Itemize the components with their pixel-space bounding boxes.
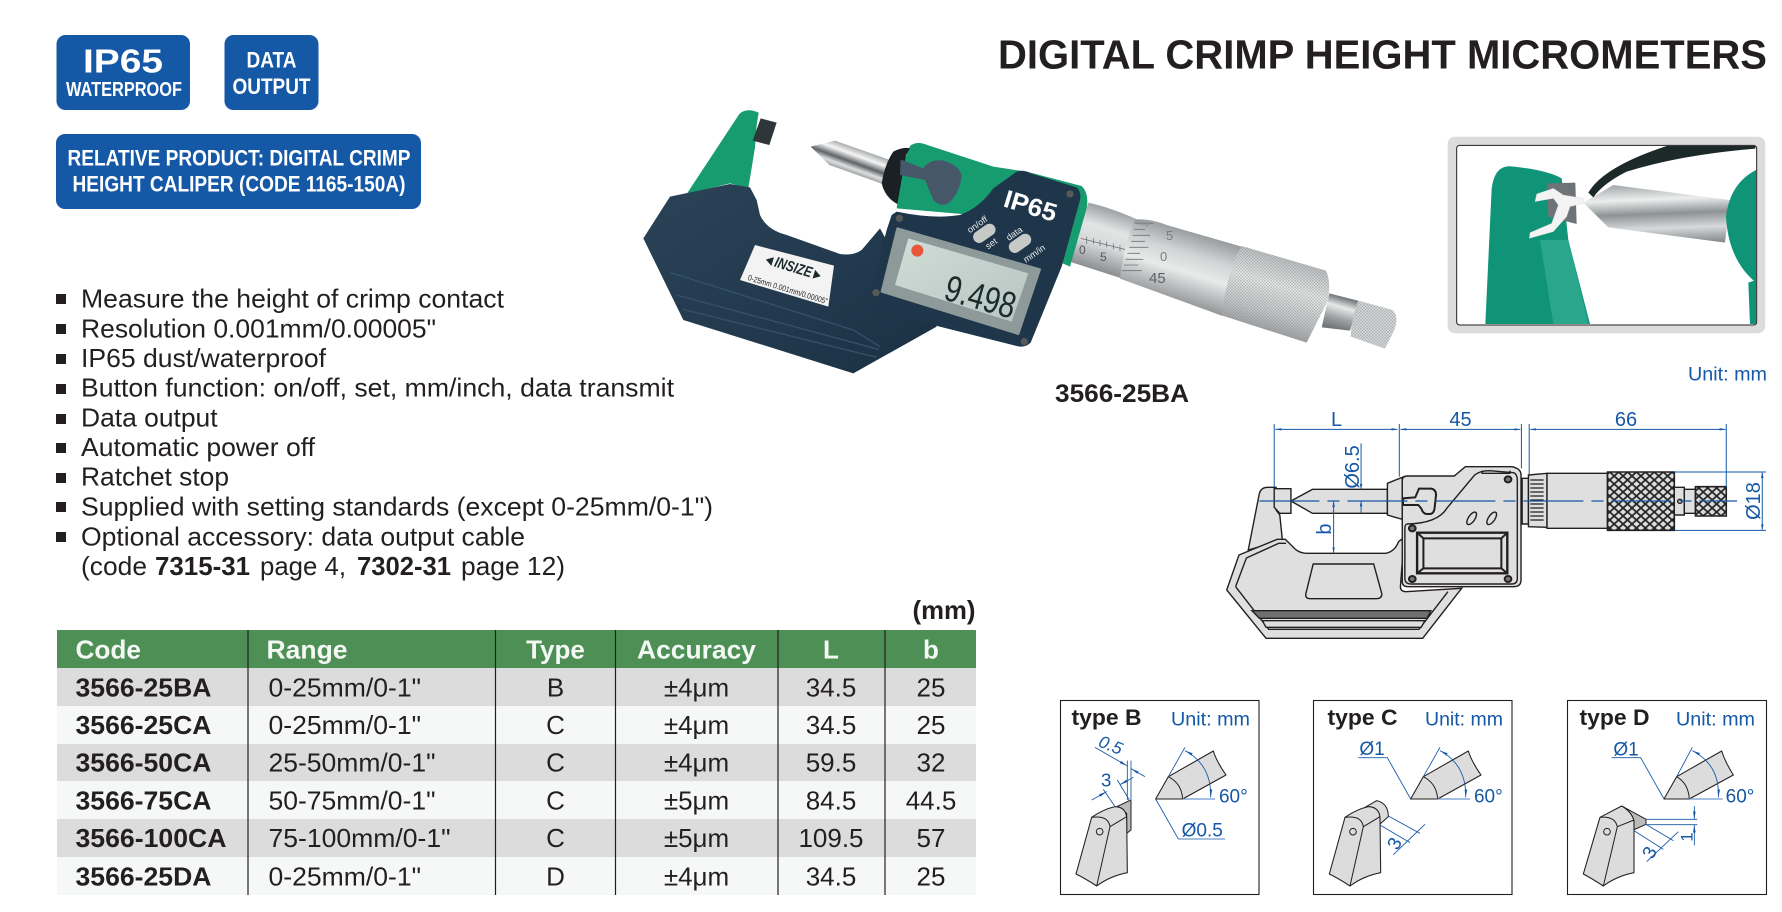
panel: type B (1060, 700, 1259, 894)
table rows: 25-50mm/0-1" (268, 748, 436, 778)
navy display head (869, 171, 1080, 347)
feature bullet list: Button function: on/off, set, mm/inch, data transmit (81, 373, 675, 403)
anvil blade D (1622, 806, 1646, 830)
LCD screen (895, 238, 1028, 322)
buttons (1465, 511, 1478, 526)
blue dimension lines C (1358, 747, 1470, 855)
spindle (1583, 185, 1730, 243)
dimension drawing (1227, 409, 1766, 638)
table rows: 3566-100CA (76, 823, 227, 853)
table rows: ±4μm (664, 862, 729, 892)
table rows: ±5μm (664, 823, 729, 853)
green head casing (897, 143, 1087, 267)
table unit label: (mm) (912, 595, 976, 625)
table header: Range (266, 634, 348, 664)
table rows: 59.5 (806, 748, 856, 778)
feature bullet list: Supplied with setting standards (except 0-25mm/0-1") (81, 491, 713, 521)
product photo: digital micrometer: 0 (1079, 243, 1086, 257)
badge: IP65 waterproof (56, 35, 190, 110)
product photo: digital micrometer: set (983, 236, 999, 251)
feature bullet list: Measure the height of crimp contact (81, 283, 505, 313)
product photo: digital micrometer: mm/in (1021, 242, 1047, 265)
product photo: digital micrometer: IP65 (1000, 185, 1060, 228)
green head (1726, 170, 1756, 283)
panel: type C: 3 (1383, 834, 1406, 853)
anvil blade B (1117, 801, 1131, 833)
dimension drawing: Ø6.5 (1342, 445, 1364, 489)
panel: type D: 3 (1638, 843, 1661, 862)
table rows: 3566-50CA (76, 748, 212, 778)
badge: IP65 waterproof: WATERPROOF (66, 79, 182, 101)
table rows: 57 (917, 823, 945, 853)
product photo: digital micrometer (643, 110, 1396, 373)
panel: type D (1568, 700, 1766, 894)
table rows: 0-25mm/0-1" (268, 862, 421, 892)
feature bullet list: Optional accessory: data output cable (81, 521, 525, 551)
key knob (900, 159, 962, 205)
thimble graduations (1122, 223, 1153, 271)
cone tip D (1664, 751, 1733, 799)
panel: type B: 3 (1101, 770, 1111, 791)
feature bullet list: IP65 dust/waterproof (81, 343, 327, 373)
thimble body (1120, 219, 1242, 316)
table rows: 25 (917, 710, 945, 740)
table header: Type (526, 634, 585, 664)
anvil (1547, 183, 1577, 224)
badge: IP65 waterproof: IP65 (83, 42, 163, 80)
product photo: digital micrometer: 45 (1149, 270, 1166, 287)
table rows: ±4μm (664, 673, 729, 703)
knurled grip (1222, 246, 1329, 343)
ratchet knob (1351, 301, 1396, 349)
badge: relative product: RELATIVE PRODUCT: DIGITAL CRIMP (68, 146, 410, 170)
table header: Code (76, 634, 141, 664)
table rows: ±4μm (664, 748, 729, 778)
table header: Accuracy (637, 634, 757, 664)
panel: type B: type B (1072, 705, 1142, 730)
product photo: digital micrometer: data (1004, 224, 1024, 243)
dimension drawing: L (1331, 409, 1342, 431)
sleeve, thimble (1522, 478, 1528, 524)
ratchet neck (1322, 293, 1359, 331)
dimension drawing: b (1314, 523, 1336, 535)
navy rubber frame (643, 184, 937, 373)
table rows: C (546, 748, 565, 778)
feature bullet list: 7302-31 (357, 551, 451, 581)
feature bullet list: 7315-31 (155, 551, 250, 581)
table rows: C (546, 710, 565, 740)
table rows: 3566-25CA (76, 710, 212, 740)
panel: type C: Ø1 (1359, 739, 1385, 760)
LCD bezel (882, 228, 1040, 334)
key (1403, 489, 1436, 514)
table rows: 109.5 (798, 823, 864, 853)
badge: relative product: HEIGHT CALIPER (CODE 1165-150A) (72, 172, 406, 196)
table rows: 34.5 (806, 673, 856, 703)
badge: data output: DATA (246, 48, 297, 72)
panel: type D: Ø1 (1613, 739, 1639, 760)
cone tip B (1156, 751, 1226, 799)
product photo: digital micrometer: on/off (965, 214, 990, 235)
anvil cylinder C (1365, 801, 1388, 824)
panel: type D: 60° (1726, 787, 1754, 808)
collar (1387, 477, 1402, 519)
screws (896, 215, 903, 222)
table rows: 25 (917, 673, 945, 703)
silver sleeve (1071, 203, 1138, 280)
inset photo: crimp contact measured (1448, 137, 1765, 333)
unit label: Unit: mm (1688, 364, 1767, 386)
badge: data output: OUTPUT (232, 74, 311, 99)
title: DIGITAL CRIMP HEIGHT MICROMETERS (998, 32, 1767, 78)
panel: type B: 0.5 (1096, 731, 1126, 759)
panel: type D: Unit: mm (1676, 708, 1755, 730)
panel: type C (1314, 700, 1512, 894)
anvil and spindle (1274, 489, 1291, 513)
record dot (911, 245, 923, 257)
badge: data output (224, 35, 318, 110)
table rows: 44.5 (906, 786, 956, 816)
crimp terminal (1529, 188, 1583, 238)
feature bullet list: (code (81, 551, 147, 581)
table rows: 3566-25BA (76, 673, 212, 703)
product photo: digital micrometer: 0-25mm 0.001mm/0.00005" (747, 273, 829, 306)
blue dimension lines B (1092, 747, 1225, 839)
table rows (57, 630, 976, 895)
table rows: 0-25mm/0-1" (268, 710, 421, 740)
table rows: 25 (917, 862, 945, 892)
panel: type C: Unit: mm (1425, 708, 1503, 730)
frame grooves (671, 273, 880, 357)
table rows: 3566-75CA (76, 786, 212, 816)
table header: L (823, 634, 839, 664)
sleeve scale ticks (1081, 237, 1127, 251)
display (1417, 533, 1507, 573)
green anvil post (1485, 166, 1590, 324)
table rows: C (546, 786, 565, 816)
feature bullet list: Ratchet stop (81, 462, 229, 492)
feature bullet list: page 4, (260, 551, 346, 581)
table rows: 3566-25DA (76, 862, 212, 892)
white logo label (740, 245, 834, 307)
panel: type B: 60° (1219, 787, 1248, 808)
green anvil arm (687, 110, 759, 194)
cone tip C (1411, 751, 1481, 799)
extension lines (1274, 424, 1766, 530)
black collar (882, 148, 910, 204)
table header: b (923, 634, 939, 664)
table rows: C (546, 823, 565, 853)
table rows: 32 (917, 748, 945, 778)
table header (57, 630, 976, 668)
product photo: digital micrometer: 5 (1166, 228, 1173, 243)
blue dimension lines D (1612, 747, 1723, 862)
spindle tip (811, 141, 890, 184)
model caption: 3566-25BA (1055, 380, 1189, 408)
dimension drawing: 66 (1615, 409, 1637, 431)
table rows: B (547, 673, 564, 703)
product photo: digital micrometer: ◄INSIZE► (761, 251, 825, 285)
table rows: 50-75mm/0-1" (268, 786, 436, 816)
badge: relative product (56, 134, 421, 209)
table rows: ±5μm (664, 786, 729, 816)
head (1402, 467, 1521, 587)
product photo: digital micrometer: 5 (1100, 250, 1107, 264)
panel: type C: 60° (1474, 787, 1503, 808)
frame grooves (1252, 611, 1431, 618)
buttons (971, 221, 998, 245)
table rows: 34.5 (806, 862, 856, 892)
tweezers (1588, 146, 1755, 197)
screws (1505, 476, 1511, 482)
panel: type D: type D (1580, 705, 1650, 730)
frame body (1248, 487, 1282, 550)
centre line (1259, 500, 1737, 502)
panel: type B: Ø0.5 (1182, 821, 1223, 842)
table rows: ±4μm (664, 710, 729, 740)
panel: type C: type C (1328, 705, 1398, 730)
table rows: 0-25mm/0-1" (268, 673, 421, 703)
product photo: digital micrometer: 0 (1160, 249, 1167, 264)
feature bullet list: Data output (81, 403, 218, 433)
feature bullet list: Automatic power off (81, 432, 316, 462)
specification table (57, 630, 976, 895)
panel: type D: 1 (1677, 832, 1696, 842)
table rows: 34.5 (806, 710, 856, 740)
table rows: D (546, 862, 565, 892)
product photo: digital micrometer: 9.498 (940, 267, 1021, 327)
feature bullet list: page 12) (461, 551, 565, 581)
anvil (753, 118, 777, 145)
dimension drawing: Ø18 (1743, 482, 1765, 520)
feature bullet list (56, 283, 713, 581)
dimension lines (1275, 428, 1397, 430)
table rows: 75-100mm/0-1" (268, 823, 450, 853)
panel: type B: Unit: mm (1171, 708, 1250, 730)
dimension drawing: 45 (1449, 409, 1472, 431)
table rows: 84.5 (806, 786, 856, 816)
feature bullet list: Resolution 0.001mm/0.00005" (81, 313, 436, 343)
